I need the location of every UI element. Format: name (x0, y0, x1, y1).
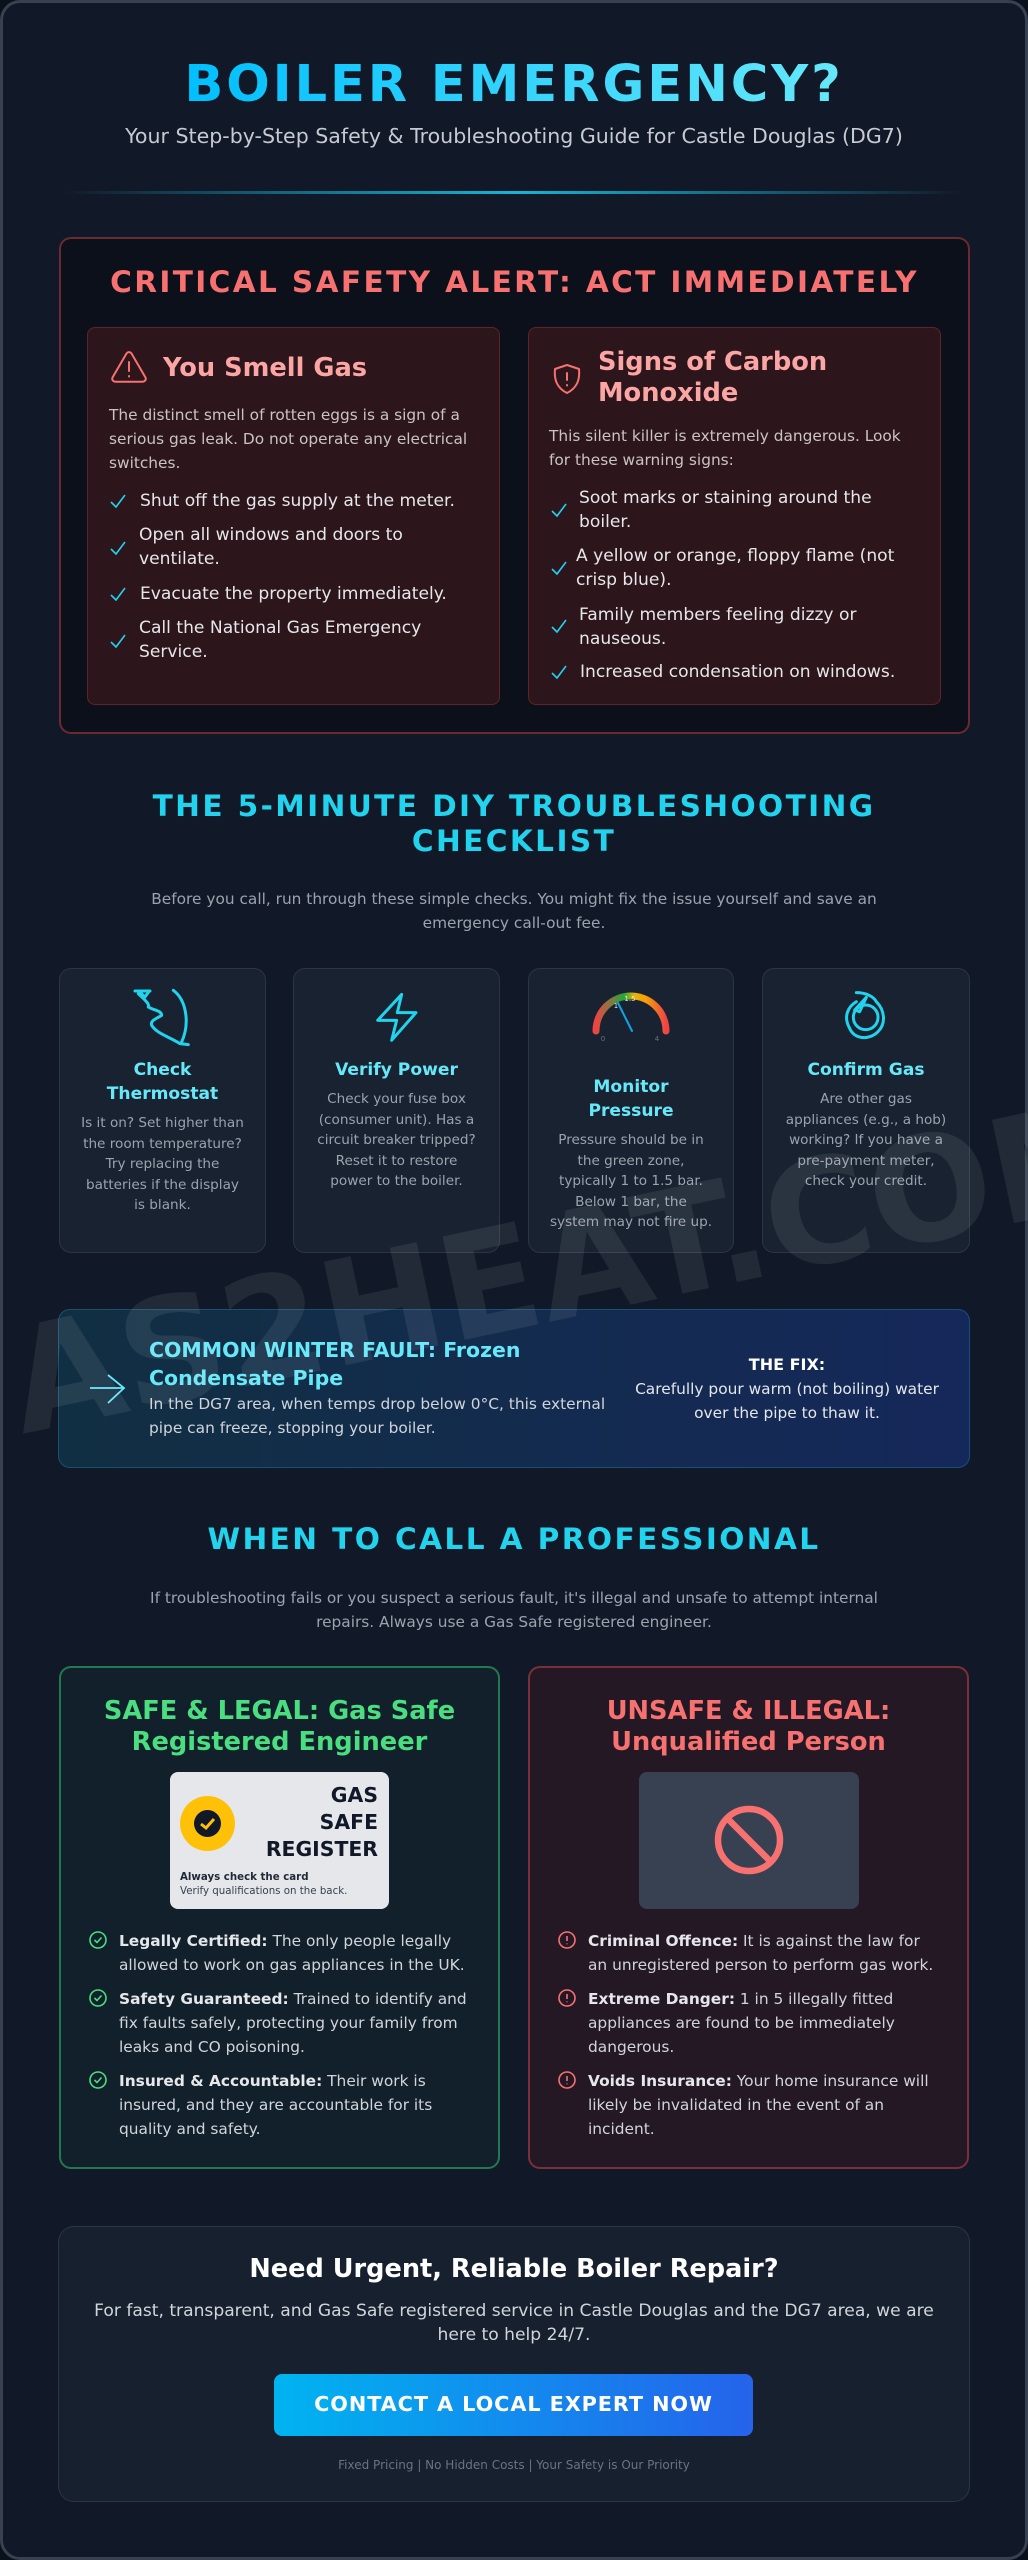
text: gas description (786, 1091, 946, 1189)
panel: confirm gas (762, 968, 970, 1253)
list item: condensation: Increased condensation on windows. (580, 662, 895, 682)
text: gas description (108, 406, 467, 472)
icon: check circle (89, 1989, 107, 2007)
list item: dizzy (579, 605, 857, 649)
callout: the fix: over the pipe to thaw it. (694, 1404, 880, 1422)
chart: pressure gauge: 0 (601, 1035, 605, 1043)
text: legally certified (119, 1929, 465, 1977)
text: thermostat description: Is it on? Set higher than (81, 1115, 244, 1131)
text: extreme danger (588, 1987, 895, 2059)
chart: pressure gauge: 1.5 (624, 995, 636, 1003)
panel: you smell gas (87, 327, 500, 705)
icon: alert circle (558, 1989, 576, 2007)
text: gas description: appliances (e.g., a hob) (786, 1112, 946, 1128)
text: gas description: switches. (109, 454, 180, 472)
list item: call emergency service (139, 618, 421, 662)
text: fault description: pipe can freeze, stopping your boiler. (149, 1419, 436, 1437)
heading: check thermostat: Thermostat (107, 1084, 218, 1104)
icon: check (110, 542, 126, 556)
card: prohibited placeholder (639, 1772, 859, 1909)
text: thermostat description (81, 1115, 244, 1213)
list item: flame: A yellow or orange, floppy flame (not (576, 546, 894, 566)
list item: open windows: ventilate. (139, 549, 220, 569)
callout: the fix: THE FIX: (749, 1355, 825, 1374)
text: gas safe register wordmark: GAS (331, 1782, 378, 1806)
list item: open windows (139, 525, 403, 569)
heading: frozen condensate pipe: Condensate Pipe (149, 1366, 343, 1390)
heading: unsafe and illegal: UNSAFE & ILLEGAL: (607, 1696, 890, 1726)
list item: flame (576, 546, 894, 590)
text: professional intro: repairs. Always use a Gas Safe registered engineer. (316, 1613, 712, 1631)
card: gas safe register (170, 1772, 389, 1909)
heading: frozen condensate pipe: COMMON WINTER FAULT: Frozen (149, 1338, 520, 1362)
text: cta description: For fast, transparent, and Gas Safe registered service in Castle Douglas and the DG7 area, we are (94, 2301, 934, 2321)
icon: check (552, 504, 566, 518)
text: power description: (consumer unit). Has a (319, 1112, 474, 1128)
text: thermostat description: is blank. (134, 1197, 191, 1213)
text: power description: Check your fuse box (327, 1091, 466, 1107)
text: criminal offence: an unregistered person to perform gas work. (588, 1956, 933, 1974)
text: power description: power to the boiler. (330, 1173, 463, 1189)
text: card note: Always check the card (180, 1871, 309, 1883)
text: power description (317, 1091, 476, 1189)
text: insured and accountable: quality and safety. (119, 2120, 261, 2138)
heading: when to call a professional: WHEN TO CALL A PROFESSIONAL (207, 1522, 821, 1556)
text: safety guaranteed: Safety Guaranteed: Trained to identify and (119, 1990, 467, 2008)
heading: need urgent repair: Need Urgent, Reliable Boiler Repair? (249, 2254, 779, 2284)
panel: safe and legal (59, 1666, 500, 2169)
text: gas safe register wordmark (266, 1782, 378, 1861)
text: pressure description: typically 1 to 1.5 bar. (559, 1173, 703, 1189)
list item: dizzy: nauseous. (579, 629, 666, 649)
text: pressure description (550, 1132, 712, 1230)
text: pressure description: the green zone, (578, 1152, 684, 1168)
icon: thermostat (134, 988, 190, 1046)
text: voids insurance: likely be invalidated in the event of an (588, 2096, 884, 2114)
icon: check circle (89, 2071, 107, 2089)
text: voids insurance: Voids Insurance: Your home insurance will (588, 2072, 929, 2090)
text: power description: Reset it to restore (336, 1152, 457, 1168)
chart: pressure gauge (592, 992, 670, 1043)
text: power description: circuit breaker tripped? (317, 1132, 476, 1148)
text: insured and accountable (119, 2069, 432, 2141)
text: professional intro (150, 1589, 878, 1631)
text: card note: Verify qualifications on the back. (180, 1884, 347, 1896)
panel: critical safety alert (59, 237, 970, 734)
text: checklist intro (151, 890, 877, 932)
heading: check thermostat: Check (134, 1060, 191, 1080)
panel: verify power (293, 968, 500, 1253)
icon: gas flame (845, 991, 885, 1040)
list item: dizzy: Family members feeling dizzy or (579, 605, 856, 625)
list item: shut off: Shut off the gas supply at the meter. (140, 491, 455, 511)
button: contact a local expert (274, 2374, 753, 2436)
icon: check (110, 634, 126, 648)
list item: soot (579, 488, 872, 532)
text: safety guaranteed: fix faults safely, protecting your family from (119, 2014, 458, 2032)
panel: call to action (58, 2226, 970, 2502)
heading: signs of carbon monoxide: Signs of Carbon (598, 347, 827, 377)
text: card note (180, 1871, 347, 1896)
icon: check circle (89, 1931, 107, 1949)
icon: check (552, 620, 566, 634)
text: cta description (58, 2299, 970, 2347)
callout: the fix (635, 1355, 939, 1422)
heading: verify power: Verify Power (335, 1060, 458, 1080)
text: thermostat description: the room temperature? (83, 1136, 242, 1152)
text: safety guaranteed (119, 1987, 467, 2059)
text: gas description: serious gas leak. Do not operate any electrical (109, 430, 467, 448)
heading: unsafe and illegal (528, 1696, 969, 1758)
text: voids insurance: incident. (588, 2120, 655, 2138)
heading: safe and legal (104, 1696, 455, 1757)
title: BOILER EMERGENCY? (184, 54, 844, 114)
text: legally certified: allowed to work on gas appliances in the UK. (119, 1956, 465, 1974)
text: thermostat description: batteries if the display (86, 1176, 239, 1192)
icon: shield (554, 364, 580, 394)
text: gas description: Are other gas (820, 1091, 912, 1107)
text: insured and accountable: Insured & Accountable: Their work is (119, 2072, 426, 2090)
text: extreme danger: Extreme Danger: 1 in 5 illegally fitted (588, 1990, 893, 2008)
text: pressure description: Pressure should be in (558, 1132, 704, 1148)
text: co description: This silent killer is extremely dangerous. Look (549, 427, 901, 445)
callout: the fix: Carefully pour warm (not boiling) water (635, 1380, 939, 1398)
text: criminal offence: Criminal Offence: It is against the law for (588, 1932, 920, 1950)
text: cta description: here to help 24/7. (438, 2325, 590, 2345)
icon: lightning bolt (376, 992, 418, 1042)
text: gas description: check your credit. (805, 1173, 927, 1189)
text: legally certified: Legally Certified: The only people legally (119, 1932, 451, 1950)
text: insured and accountable: insured, and they are accountable for its (119, 2096, 432, 2114)
text: gas safe register wordmark: REGISTER (266, 1837, 378, 1861)
list item: call emergency service: Service. (139, 642, 208, 662)
text: voids insurance (588, 2069, 929, 2141)
panel: unsafe and illegal (528, 1666, 969, 2169)
heading: monitor pressure (588, 1077, 674, 1121)
text: pressure description: system may not fire up. (550, 1214, 712, 1230)
icon: check (552, 666, 566, 680)
icon: gas safe badge (180, 1796, 235, 1851)
text: pressure description: Below 1 bar, the (575, 1194, 687, 1210)
text: extreme danger: appliances are found to be immediately (588, 2014, 895, 2032)
text: checklist intro: emergency call-out fee. (423, 914, 605, 932)
heading: safe and legal: SAFE & LEGAL: Gas Safe (104, 1696, 455, 1726)
heading: monitor pressure: Monitor (593, 1077, 669, 1097)
chart: pressure gauge: 1 (614, 1002, 618, 1010)
panel: common winter fault (58, 1309, 970, 1468)
heading: frozen condensate pipe (149, 1338, 520, 1390)
text: thermostat description: Try replacing the (106, 1156, 219, 1172)
heading: confirm gas: Confirm Gas (807, 1060, 925, 1080)
text: safety guaranteed: leaks and CO poisoning. (119, 2038, 305, 2056)
text: gas safe register wordmark: SAFE (320, 1810, 378, 1834)
heading: check thermostat (106, 1060, 218, 1104)
heading: signs of carbon monoxide: Monoxide (598, 378, 738, 408)
icon: arrow (90, 1374, 126, 1404)
icon: check (110, 494, 126, 508)
text: co description: for these warning signs: (549, 451, 734, 469)
icon: check (110, 588, 126, 602)
icon: alert circle (558, 2071, 576, 2089)
heading: safe and legal: Registered Engineer (132, 1727, 427, 1757)
heading: troubleshooting checklist (152, 789, 875, 858)
text: gas description: working? If you have a (789, 1132, 943, 1148)
text: checklist intro: Before you call, run through these simple checks. You might fix the issue yourself and save an (151, 890, 877, 908)
heading: troubleshooting checklist: THE 5-MINUTE DIY TROUBLESHOOTING (153, 789, 875, 823)
text: co description (548, 427, 901, 469)
list item: flame: crisp blue). (576, 570, 672, 590)
panel: check thermostat (59, 968, 266, 1253)
icon: warning triangle (111, 351, 147, 383)
icon: alert circle (558, 1931, 576, 1949)
heading: monitor pressure: Pressure (588, 1101, 674, 1121)
icon: check (552, 562, 566, 576)
heading: critical safety alert: CRITICAL SAFETY ALERT: ACT IMMEDIATELY (110, 265, 919, 299)
heading: troubleshooting checklist: CHECKLIST (412, 824, 616, 858)
text: gas description: pre-payment meter, (797, 1152, 935, 1168)
text: professional intro: If troubleshooting fails or you suspect a serious fault, it's illegal and unsafe to attempt internal (150, 1589, 878, 1607)
button: contact a local expert: CONTACT A LOCAL EXPERT NOW (314, 2392, 713, 2416)
text: extreme danger: dangerous. (588, 2038, 674, 2056)
text: criminal offence (588, 1929, 933, 1977)
panel: carbon monoxide (528, 327, 941, 705)
heading: unsafe and illegal: Unqualified Person (611, 1727, 886, 1757)
panel: monitor pressure (528, 968, 734, 1253)
text: fault description: In the DG7 area, when temps drop below 0°C, this external (149, 1395, 605, 1413)
heading: signs of carbon monoxide (598, 347, 827, 408)
icon: prohibited (715, 1806, 783, 1874)
list item: evacuate: Evacuate the property immediately. (140, 584, 447, 604)
list item: soot: Soot marks or staining around the (579, 488, 872, 508)
list item: open windows: Open all windows and doors to (139, 525, 403, 545)
subtitle: Your Step-by-Step Safety & Troubleshooting Guide for Castle Douglas (DG7) (125, 124, 903, 148)
list item: call emergency service: Call the National Gas Emergency (139, 618, 421, 638)
text: fault description (149, 1395, 605, 1437)
heading: you smell gas: You Smell Gas (163, 353, 367, 383)
text: reassurance line: Fixed Pricing | No Hidden Costs | Your Safety is Our Priority (338, 2458, 690, 2472)
chart: pressure gauge: 4 (655, 1035, 660, 1043)
text: gas description: The distinct smell of rotten eggs is a sign of a (109, 406, 460, 424)
list item: soot: boiler. (579, 512, 631, 532)
